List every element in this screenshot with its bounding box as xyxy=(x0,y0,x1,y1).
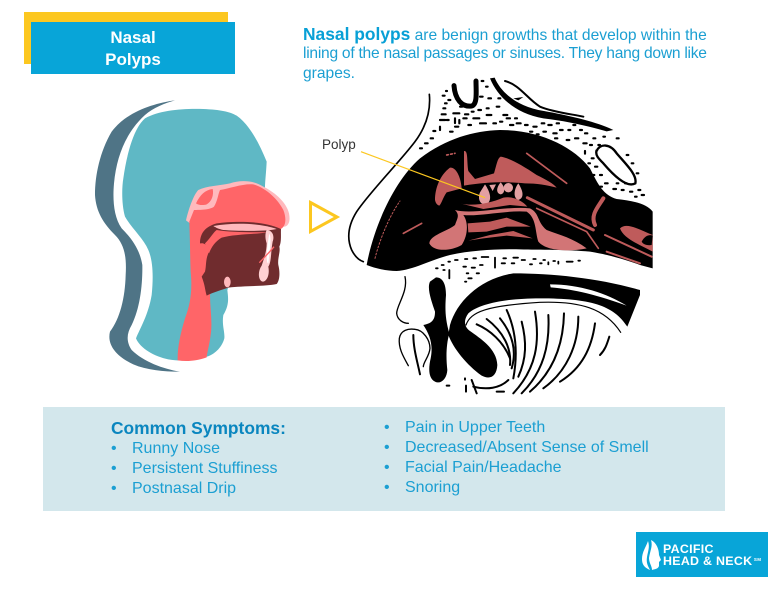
top curved bone xyxy=(490,78,613,131)
right red oval xyxy=(620,226,653,252)
palate highlight xyxy=(213,224,277,231)
banner yellow backing xyxy=(24,12,228,64)
nasal cavity cross-section illustration xyxy=(349,78,653,393)
lower bar xyxy=(460,197,527,209)
list: right symptoms: Facial Pain/Headache xyxy=(405,459,562,476)
left blob xyxy=(435,168,462,206)
white muscle strip xyxy=(550,284,627,306)
logo wordmark: PACIFIC xyxy=(663,542,714,556)
intro text xyxy=(303,24,707,82)
nose outline xyxy=(349,94,430,262)
list: right symptoms: Pain in Upper Teeth xyxy=(405,419,545,436)
list: right symptoms xyxy=(384,419,649,496)
polyp pointer line xyxy=(361,152,485,198)
upper concha xyxy=(464,151,557,188)
symptoms heading: Common Symptoms: xyxy=(111,418,286,438)
list: left symptoms xyxy=(111,440,278,497)
list: right symptoms: Snoring xyxy=(405,479,460,496)
banner title xyxy=(31,22,235,74)
panel: common symptoms: • xyxy=(384,459,390,476)
bone dashes xyxy=(420,81,644,197)
panel: common symptoms: • xyxy=(111,460,117,477)
intro text: lining of the nasal passages or sinuses. They hang down like xyxy=(303,45,707,62)
head teal silhouette xyxy=(122,109,267,361)
philtrum outline xyxy=(397,277,408,323)
tongue ribs xyxy=(447,310,609,393)
banner title: Nasal xyxy=(110,28,156,47)
logo: Pacific Head & Neck xyxy=(636,532,768,577)
panel: common symptoms xyxy=(43,407,725,511)
polyp drip xyxy=(259,230,273,282)
logo wordmark: HEAD & NECK SM xyxy=(663,554,761,568)
drip highlight xyxy=(267,233,270,263)
panel: common symptoms: • xyxy=(384,479,390,496)
intro text: Nasal polyps are benign growths that develop within the xyxy=(303,24,707,44)
list: left symptoms: Runny Nose xyxy=(132,440,220,457)
sinus loop xyxy=(596,146,636,184)
mouth and throat maroon xyxy=(200,222,281,296)
nasal cavity outline xyxy=(186,181,290,227)
panel: common symptoms: • xyxy=(111,440,117,457)
bone hourglass xyxy=(423,277,449,382)
middle concha xyxy=(468,218,531,232)
tongue arch xyxy=(448,273,640,377)
upper U bone xyxy=(454,81,476,106)
lower cross-section xyxy=(397,257,640,393)
sinus opening xyxy=(196,189,213,205)
dark cavity xyxy=(367,130,653,271)
polyp label: Polyp xyxy=(322,137,356,152)
lower concha xyxy=(468,231,533,241)
rib outline xyxy=(466,302,621,332)
panel: common symptoms: • xyxy=(111,480,117,497)
list: right symptoms: Decreased/Absent Sense of Smell xyxy=(405,439,649,456)
panel: common symptoms: • xyxy=(384,439,390,456)
banner title: Polyps xyxy=(105,50,161,69)
soft palate red band xyxy=(205,230,268,253)
upper cross-section xyxy=(349,78,653,271)
red strand xyxy=(259,247,274,263)
tonsil xyxy=(224,277,231,287)
list: left symptoms: Postnasal Drip xyxy=(132,480,236,497)
inferior concha xyxy=(429,208,587,250)
polyps xyxy=(479,182,523,204)
head side profile illustration xyxy=(95,100,290,372)
airway red xyxy=(178,184,285,361)
intro text: grapes. xyxy=(303,65,355,82)
lower dashes xyxy=(436,257,580,282)
panel: common symptoms: • xyxy=(384,419,390,436)
head shadow xyxy=(95,100,180,372)
logo icon: face profile xyxy=(642,540,661,570)
right passage strands xyxy=(375,153,652,263)
logo wordmark xyxy=(663,542,761,568)
lips outline xyxy=(399,329,430,367)
list: left symptoms: Persistent Stuffiness xyxy=(132,460,278,477)
title banner xyxy=(24,12,235,74)
arrow: yellow triangle xyxy=(310,202,337,232)
